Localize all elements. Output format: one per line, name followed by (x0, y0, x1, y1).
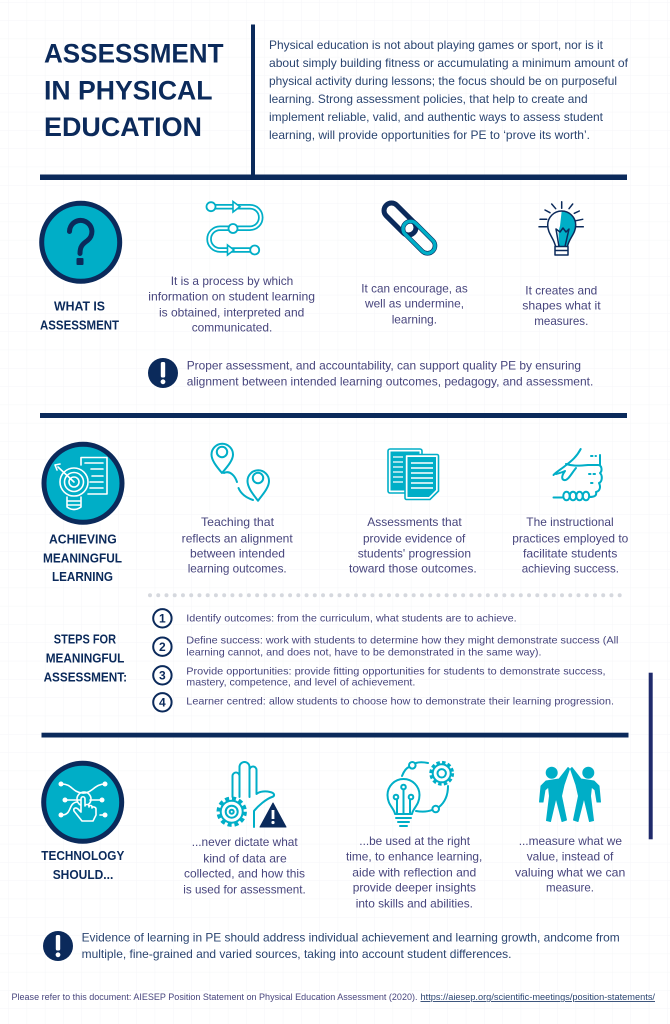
text: measure: valuing what we can (515, 865, 625, 879)
text: assessments: provide evidence of (363, 531, 466, 545)
text: assessments: Assessments that (367, 515, 462, 529)
step 3: mastery, competence, and level of achievement. (186, 677, 415, 689)
icon: two people high five (540, 767, 600, 822)
icon: bulb and gear cycle (388, 762, 453, 826)
text: evidence: Evidence of learning in PE should address individual achievement and learning growth, andcome from (82, 931, 620, 945)
panel: technology should (41, 762, 625, 910)
step 3: 3 (159, 669, 166, 683)
heading: steps (44, 631, 127, 684)
text: encourage: learning. (392, 312, 437, 326)
heading: steps: ASSESSMENT: (44, 669, 127, 684)
step 3: Provide opportunities: provide fitting opportunities for students to demonstrate success, (186, 666, 606, 678)
step 1: Identify outcomes: from the curriculum, what students are to achieve. (186, 613, 517, 625)
text: assessments: toward those outcomes. (349, 562, 477, 576)
text: right time: ...be used at the right (359, 834, 471, 848)
text: evidence: multiple, fine-grained and varied sources, taking into account student differences. (82, 947, 511, 961)
panel: achieving meaningful learning (43, 444, 629, 584)
intro text block: about simply building fitness or accumulating a minimum amount of (269, 56, 629, 70)
heading: technology should: TECHNOLOGY (41, 848, 125, 863)
text: assessments (349, 515, 477, 576)
heading: achieving meaningful learning: ACHIEVING (49, 531, 117, 546)
text: never dictate: collected, and how this (184, 867, 305, 881)
text: measure (515, 834, 625, 895)
step 3 (153, 666, 606, 689)
intro text block: Physical education is not about playing games or sport, nor is it (269, 38, 604, 52)
text: process: It is a process by which (171, 274, 293, 288)
title: EDUCATION (44, 112, 202, 142)
text: right time: time, to enhance learning, (346, 850, 482, 864)
title: IN PHYSICAL (44, 76, 212, 106)
text: practices (512, 515, 629, 576)
text: alignment: learning outcomes. (188, 562, 287, 576)
heading: technology should: SHOULD... (53, 867, 113, 882)
title: ASSESSMENT (44, 38, 224, 68)
icon: hand, gear and warning (218, 762, 286, 827)
text: alignment: between intended (190, 547, 285, 561)
text: never dictate: ...never dictate what (192, 835, 298, 849)
text: measure: ...measure what we (519, 834, 622, 848)
text: assessments: students' progression (358, 547, 471, 561)
icon: touch technology badge (44, 763, 122, 841)
heading: what is assessment: ASSESSMENT (40, 317, 119, 332)
text: practices: The instructional (526, 515, 614, 529)
intro text block: physical activity during lessons; the focus should be on purposeful (269, 74, 617, 88)
text: encourage: well as undermine, (364, 297, 464, 311)
text: right time: aide with reflection and (352, 865, 476, 879)
step 2: Define success: work with students to determine how they might demonstrate success (All (186, 635, 618, 647)
text: encourage (361, 281, 468, 326)
text: alignment (182, 515, 293, 576)
text: practices: achieving success. (522, 562, 619, 576)
heading: what is assessment (40, 299, 119, 332)
icon: documents (388, 449, 438, 500)
icon: exclamation (148, 358, 178, 388)
callout: alignment: alignment between intended learning outcomes, pedagogy, and assessment. (187, 375, 593, 389)
step 2: learning cannot, and does not, have to be demonstrated in the same way). (186, 646, 542, 658)
icon: chain link (381, 200, 438, 256)
icon: handshake (554, 449, 602, 500)
step 1 (153, 609, 517, 628)
intro text block (269, 38, 629, 142)
icon: exclamation (43, 931, 73, 961)
callout: alignment (187, 358, 593, 389)
text: practices: facilitate students (523, 547, 617, 561)
heading: what is assessment: WHAT IS (54, 299, 105, 314)
text: shapes (522, 283, 601, 328)
step 4: 4 (159, 696, 166, 710)
text: encourage: It can encourage, as (361, 281, 468, 295)
text: practices: practices employed to (512, 531, 629, 545)
intro text block: learning. Strong assessment policies, that help to create and (269, 92, 588, 106)
step 4 (153, 693, 614, 712)
text: right time: into skills and abilities. (356, 896, 473, 910)
step 2: 2 (159, 640, 166, 654)
callout: alignment: Proper assessment, and accountability, can support quality PE by ensuring (187, 358, 581, 372)
callout: evidence of learning (43, 931, 620, 961)
text: measure: measure. (546, 881, 594, 895)
title (44, 38, 224, 142)
text: shapes: measures. (534, 314, 588, 328)
icon: process path (206, 202, 261, 255)
text: alignment: reflects an alignment (182, 531, 293, 545)
step 1: 1 (159, 612, 166, 626)
text: evidence (82, 931, 620, 961)
intro text block: implement reliable, valid, and authentic ways to assess student (269, 110, 604, 124)
icon: question mark badge (42, 203, 120, 281)
text: shapes: It creates and (525, 283, 597, 297)
heading: achieving meaningful learning: LEARNING (52, 569, 113, 584)
step 2 (153, 635, 618, 658)
heading: achieving meaningful learning: MEANINGFUL (43, 550, 122, 565)
text: never dictate: is used for assessment. (183, 882, 306, 896)
text: alignment: Teaching that (201, 515, 275, 529)
icon: location pins (212, 444, 269, 501)
heading: steps: STEPS FOR (54, 631, 117, 646)
footer reference: Please refer to this document: AIESEP Position Statement on Physical Education Assessment (2020). (12, 992, 418, 1002)
text: process: is obtained, interpreted and (159, 305, 304, 319)
text: process (148, 274, 315, 335)
text: shapes: shapes what it (522, 299, 601, 313)
heading: technology should (41, 848, 125, 882)
text: right time (346, 834, 482, 910)
icon: target bulb badge (44, 444, 122, 522)
intro text block: learning, will provide opportunities for PE to ‘prove its worth’. (269, 128, 590, 142)
text: process: information on student learning (148, 290, 315, 304)
footer reference: https://aiesep.org/scientific-meetings/position-statements/ (420, 992, 656, 1002)
panel: what is assessment (40, 200, 601, 389)
icon: light bulb (539, 202, 583, 255)
text: never dictate (183, 835, 306, 896)
text: measure: value, instead of (527, 850, 614, 864)
panel: steps for meaningful assessment (44, 609, 618, 712)
heading: achieving meaningful learning (43, 531, 122, 584)
text: never dictate: kind of data are (203, 851, 287, 865)
heading: steps: MEANINGFUL (46, 650, 124, 665)
step 4: Learner centred: allow students to choose how to demonstrate their learning progression. (186, 696, 614, 708)
footer reference (12, 992, 656, 1002)
text: process: communicated. (192, 321, 272, 335)
text: right time: provide deeper insights (353, 881, 476, 895)
